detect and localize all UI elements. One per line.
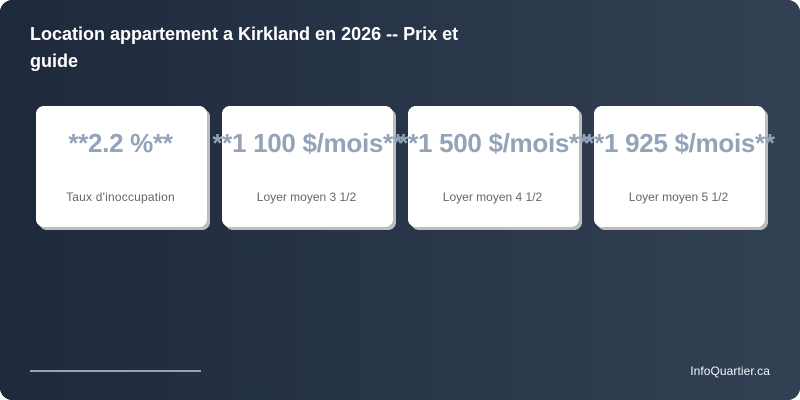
stat: 4 1/2 rent value: **1 500 $/mois**: [398, 128, 589, 158]
label: 5 1/2 rent: Loyer moyen 5 1/2: [629, 190, 728, 204]
title: [30, 24, 458, 71]
label: 3 1/2 rent: Loyer moyen 3 1/2: [257, 190, 356, 204]
stat: 5 1/2 rent value: **1 925 $/mois**: [584, 128, 775, 158]
title: Location appartement a Kirkland en 2026 -- Prix et: [30, 24, 458, 44]
title: guide: [30, 51, 78, 71]
label: 4 1/2 rent: Loyer moyen 4 1/2: [443, 190, 542, 204]
label: vacancy rate: Taux d'inoccupation: [66, 190, 175, 204]
brand: InfoQuartier.ca: [690, 364, 770, 378]
stat: 3 1/2 rent value: **1 100 $/mois**: [212, 128, 403, 158]
stat: vacancy rate value: **2.2 %**: [68, 128, 173, 158]
